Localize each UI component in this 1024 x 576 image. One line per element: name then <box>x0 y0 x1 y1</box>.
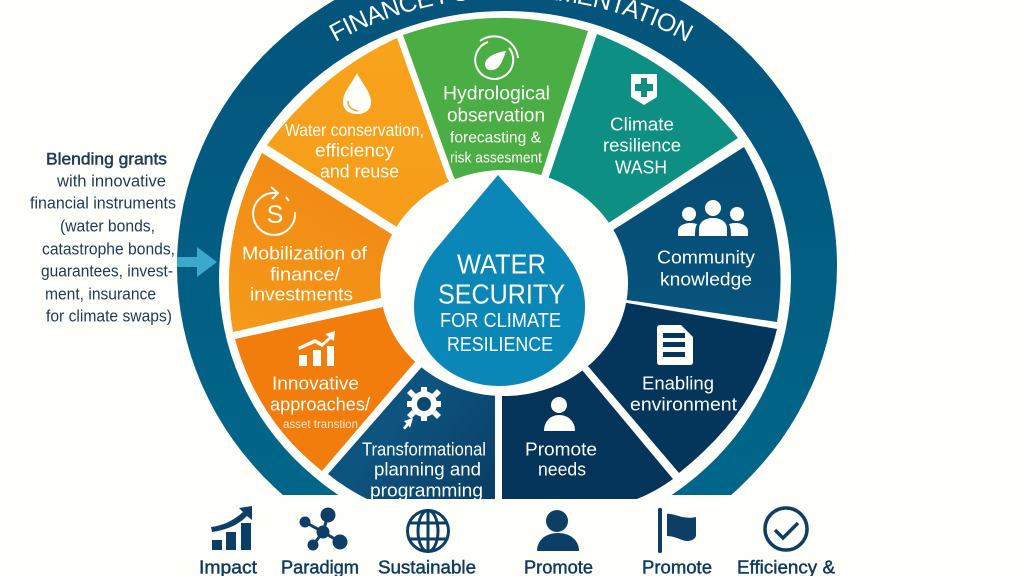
label: knowledge <box>660 268 752 290</box>
center hub: white circle <box>380 170 628 396</box>
label: needs <box>538 458 586 480</box>
label: forecasting & <box>450 130 541 146</box>
panel: enabling environment <box>588 302 777 473</box>
icon: check circle <box>765 508 807 550</box>
panel: community knowledge <box>613 147 781 322</box>
label: planning and <box>374 458 481 480</box>
panel: water conservation <box>267 38 449 227</box>
icon: chart arrow <box>211 506 252 550</box>
left text block: blending grants: (water bonds, <box>60 216 155 236</box>
icon: shield with cross <box>631 74 657 105</box>
icon: network nodes <box>300 508 347 550</box>
icon: flag <box>658 508 696 553</box>
label: finance/ <box>270 264 341 284</box>
icon: gauge with drop <box>475 36 518 79</box>
panel: hydrological observation <box>403 18 588 180</box>
center title: RESILIENCE <box>447 334 553 356</box>
label <box>270 376 370 428</box>
icon: water drop <box>343 73 371 114</box>
label: and reuse <box>320 160 399 182</box>
left text block: blending grants: Blending grants <box>46 150 167 168</box>
label: Enabling <box>642 372 714 394</box>
label: approaches/ <box>270 394 371 414</box>
icon: rising chart <box>298 331 335 366</box>
bottom item: impact <box>199 506 257 576</box>
label <box>630 376 737 410</box>
label: programming <box>370 480 483 500</box>
label: asset transtion <box>283 417 358 431</box>
left text block: blending grants: financial instruments <box>30 194 176 212</box>
label <box>657 246 756 290</box>
bottom item: paradigm <box>281 508 359 576</box>
label: efficiency <box>315 140 395 160</box>
wheel of segments <box>229 18 781 501</box>
left text block: blending grants: catastrophe bonds, <box>42 240 175 258</box>
label: risk assesment <box>450 150 543 166</box>
bottom item: efficiency <box>737 508 836 576</box>
icon: gear with arrow <box>403 387 441 430</box>
label: Transformational <box>362 438 486 460</box>
left text block: blending grants: for climate swaps) <box>46 306 172 326</box>
arrow: blending into wheel <box>177 247 217 277</box>
center title: SECURITY <box>438 278 565 310</box>
label <box>362 438 486 500</box>
label: Mobilization of <box>242 242 368 264</box>
label: resilience <box>603 134 681 156</box>
left text block: blending grants: with innovative <box>56 172 166 190</box>
label <box>604 117 680 174</box>
icon: circular arrow with S: S <box>267 201 283 229</box>
icon: globe <box>408 510 448 552</box>
label <box>285 123 423 178</box>
icon: document <box>657 325 693 365</box>
label: WASH <box>615 156 667 178</box>
left text block: blending grants: guarantees, invest- <box>41 262 173 280</box>
label: Community <box>657 246 756 268</box>
panel: climate resilience WASH <box>548 34 738 223</box>
icon: person <box>544 397 575 431</box>
center title: WATER <box>457 248 546 280</box>
label: investments <box>250 284 353 304</box>
icon: circular arrow with S <box>253 187 295 235</box>
label: Hydrological <box>443 84 550 104</box>
label: observation <box>447 106 545 126</box>
center title: FOR CLIMATE <box>440 310 561 332</box>
panel: innovative approaches <box>235 307 416 471</box>
center title <box>438 248 565 356</box>
panel: mobilization of finance <box>228 153 392 332</box>
icon: three people <box>678 200 748 236</box>
icon: person <box>537 510 579 551</box>
panel: promote needs <box>502 370 673 499</box>
label: Innovative <box>272 372 359 394</box>
bottom item: promote (person) <box>524 510 593 576</box>
panel: transformational planning <box>328 367 495 499</box>
label: Promote <box>525 438 597 460</box>
label <box>526 442 596 476</box>
left text block: blending grants <box>30 150 176 326</box>
label: Climate <box>610 114 674 134</box>
bottom item: promote (flag) <box>642 508 712 576</box>
center water drop <box>414 175 585 386</box>
bottom item: sustainable <box>378 510 476 576</box>
label <box>244 246 367 300</box>
label: Water conservation, <box>285 120 424 140</box>
left text block: blending grants: ment, insurance <box>45 284 156 304</box>
label: environment <box>630 394 737 414</box>
label <box>443 84 550 166</box>
